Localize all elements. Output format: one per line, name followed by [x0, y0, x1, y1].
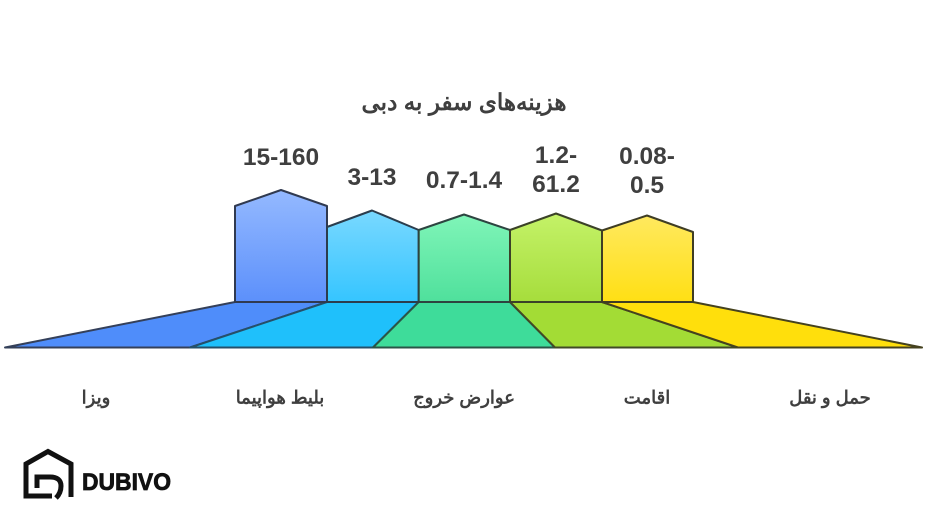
- value: accommodation: 61.2: [532, 171, 580, 198]
- bar: transport: [602, 216, 693, 302]
- bar: visa: [235, 190, 327, 302]
- label: flight ticket: بلیط هواپیما: [236, 388, 324, 408]
- value: accommodation: [532, 142, 580, 198]
- icon: house with letter D: [26, 452, 71, 498]
- label: transport: حمل و نقل: [789, 388, 871, 408]
- base segment: accommodation: [510, 302, 738, 348]
- base segment: transport: [602, 302, 922, 348]
- base segment: visa: [5, 302, 327, 348]
- value: accommodation: 1.2-: [535, 142, 577, 169]
- bar: flight ticket: [327, 210, 419, 302]
- label: accommodation: اقامت: [624, 388, 670, 408]
- value: transport: 0.08-: [619, 143, 675, 170]
- value: visa: 15-160: [243, 144, 319, 171]
- value: transport: 0.5: [630, 172, 664, 199]
- base segment: flight ticket: [190, 302, 419, 348]
- title: هزینه‌های سفر به دبی: [362, 89, 566, 117]
- value: exit fees: 0.7-1.4: [426, 167, 503, 194]
- bar: exit fees: [419, 214, 510, 302]
- label: visa: ویزا: [82, 388, 110, 408]
- bar: accommodation: [510, 214, 602, 302]
- value: transport: [619, 143, 675, 199]
- label: exit fees: عوارض خروج: [413, 388, 515, 408]
- chart: funnel of costs: [5, 190, 922, 348]
- logo: Dubivo: [26, 452, 171, 498]
- value: flight ticket: 3-13: [347, 164, 397, 191]
- base segment: exit fees: [373, 302, 555, 348]
- wordmark: DUBIVO: [82, 469, 171, 496]
